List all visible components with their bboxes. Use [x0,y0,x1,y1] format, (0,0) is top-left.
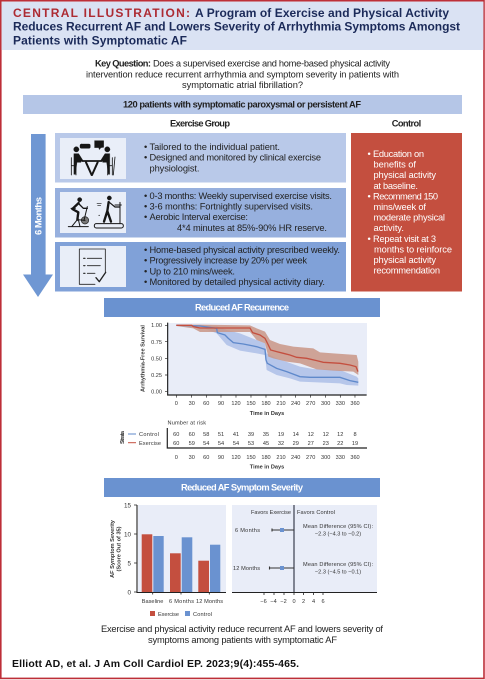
x axis labels: 6 [321,599,325,605]
row: days: 0 [175,455,178,461]
x axis labels: 4 [312,599,315,605]
x axis labels: 2 [302,599,305,605]
confidence band: control [176,325,358,386]
row: control: 60 [189,432,195,438]
row: days: 30 [189,455,195,461]
y axis labels: 10 [124,532,131,538]
x axis labels: −4 [270,599,277,605]
favors labels: Favors Exercise [251,510,291,516]
text: tailoring bullets: • [144,153,147,163]
icon: checklist [60,246,126,287]
icon: consultation [60,138,126,179]
x axis labels: 12 Months [196,599,223,605]
text: home-based bullets: Progressively increase by 20% per week [150,256,307,266]
y axis title: AF Symptom Severity [110,519,116,578]
title [2,2,483,50]
arrow: 6 months [23,134,53,297]
title: Reduces Recurrent AF and Lowers Severity of Arrhythmia Symptoms Amongst [13,20,460,34]
text: supervised bullets: • [144,202,147,212]
row: days: 210 [276,455,286,461]
row: exercise: 53 [248,441,254,447]
row: exercise: 54 [218,441,224,447]
x axis labels: −2 [280,599,287,605]
x axis labels: 330 [336,401,345,407]
row: control: 41 [233,432,239,438]
text: supervised bullets: 0-3 months: Weekly supervised exercise visits. [150,191,332,201]
row: control: 14 [293,432,299,438]
row: days: 240 [291,455,300,461]
panel: control: • [368,191,371,201]
row: exercise: 54 [233,441,239,447]
row: 12 months: 12 Months [233,566,260,572]
y axis labels: 0.25 [151,373,162,379]
row: exercise: 19 [352,441,358,447]
y axis labels: 15 [124,502,131,510]
row: days: 90 [218,455,224,461]
panel: control: months to reinforce [374,244,452,254]
text: home-based bullets: Up to 210 mins/week. [150,266,235,276]
text: home-based bullets: • [144,245,147,255]
text: supervised bullets: Aerobic Interval exercise: [150,212,248,222]
x axis labels [175,401,360,417]
row: exercise: 45 [263,441,269,447]
row: exercise: 23 [323,441,329,447]
row: control: 35 [263,432,269,438]
row: days: Time in Days [250,464,284,470]
row: 6 months: 6 Months [235,528,260,534]
row: days [175,455,360,470]
x axis labels: 360 [350,401,360,407]
row: control: 8 [353,432,357,438]
row: exercise [173,441,358,447]
forest plot: mean difference [232,505,377,605]
row: days: 330 [336,455,345,461]
confidence band: exercise [176,325,358,375]
key question: Key Question: [95,58,151,68]
y axis labels [140,323,162,395]
x axis labels: 60 [203,401,209,407]
x axis labels: 150 [246,401,256,407]
strata legend [120,430,161,447]
row: exercise: 22 [337,441,343,447]
favors labels [251,510,335,516]
text: tailoring bullets: Tailored to the individual patient. [150,142,280,152]
row: 6 months: Mean Difference (95% CI): [303,524,373,530]
row: exercise: 59 [189,441,195,447]
conclusion: symptoms among patients with symptomatic AF [148,635,337,645]
y axis labels: 0 [127,590,131,596]
favors labels: Favors Control [297,510,335,516]
y axis title [110,519,122,578]
title: Patients with Symptomatic AF [13,34,187,48]
text: tailoring bullets: Designed and monitored by clinical exercise [150,153,321,163]
strata legend: Control [139,432,159,438]
row: days: 120 [231,455,241,461]
row: exercise: 60 [173,441,179,447]
text: supervised bullets: • [144,191,147,201]
population banner: 120 patients with symptomatic paroxysmal or persistent AF [123,100,361,110]
text: tailoring bullets [144,142,321,173]
row: 12 months [233,562,373,576]
row: 6 months [235,524,373,538]
y axis labels: Arrhythmia-Free Survival [140,325,146,392]
row: control: 12 [308,432,314,438]
x axis labels: Baseline [142,599,163,605]
row: days: 270 [306,455,315,461]
text: supervised bullets: 3-6 months: Fortnightly supervised visits. [150,202,313,212]
bars: baseline [142,534,164,592]
text: supervised bullets: • [144,212,147,222]
panel: control: mins/week of [374,202,426,212]
row: days: 300 [321,455,330,461]
survival line: exercise [176,325,358,372]
key question: Does a supervised exercise and home-based physical activity [153,58,390,68]
title: CENTRAL ILLUSTRATION: [13,6,190,20]
survival line: control [176,325,358,382]
x axis labels [142,599,223,605]
panel: control: Recommend 150 [373,191,438,201]
heading: control: Control [392,119,421,129]
arrow: 6 months: 6 Months [34,197,44,235]
legend [150,611,212,618]
panel: control: recommendation [374,266,440,276]
y axis labels [124,502,131,596]
strata legend: Strata [120,430,126,444]
panel: control: benefits of [374,160,416,170]
row: days: 150 [246,455,256,461]
conclusion [101,624,383,645]
y axis labels: 0.00 [151,389,162,395]
title: A Program of Exercise and Physical Activity [195,6,449,20]
text: home-based bullets: Monitored by detailed physical activity diary. [150,277,325,287]
text: home-based bullets: • [144,277,147,287]
y axis labels: 0.75 [151,340,162,346]
text: tailoring bullets: • [144,142,147,152]
legend: Exercise [158,612,179,618]
key question: intervention reduce recurrent arrhythmia and symptom severity in patients with [86,69,399,79]
panel: control: activity. [374,223,404,233]
legend: Control [193,612,212,618]
panel: control: Education on [373,149,424,159]
row: control: 58 [203,432,209,438]
panel: control: physical activity [374,170,436,180]
row: 6 months: −2.3 (−4.3 to −0.2) [315,532,361,538]
key question: symptomatic atrial fibrillation? [182,80,303,90]
panel: control: • [368,234,371,244]
panel: individual tailoring [55,133,346,182]
row: control: 12 [337,432,343,438]
x axis labels: 30 [189,401,195,407]
y axis labels: 1.00 [151,323,162,329]
panel: control: • [368,149,371,159]
bars: 6 months [170,537,192,592]
population banner [23,95,462,114]
x axis labels: 6 Months [169,599,194,605]
bars: 12 months [198,545,220,592]
conclusion: Exercise and physical activity reduce recurrent AF and lowers severity of [101,624,383,634]
row: control: 39 [248,432,254,438]
y axis labels: 5 [127,560,131,568]
text: home-based bullets: Home-based physical activity prescribed weekly. [150,245,340,255]
icon: bike and treadmill [60,192,126,233]
text: home-based bullets: • [144,266,147,276]
table: number at risk [120,420,367,470]
panel: supervised exercise [55,188,346,238]
x axis labels: 270 [306,401,315,407]
row: exercise: 32 [278,441,284,447]
x axis labels: 0 [175,401,178,407]
table: number at risk: Number at risk [168,420,206,426]
y axis labels: 0.50 [151,356,162,362]
panel: control [351,133,462,292]
text: home-based bullets: • [144,256,147,266]
panel: control: at baseline. [374,181,418,191]
chart: arrhythmia-free survival [140,323,367,417]
key question [86,58,399,90]
x axis labels: 300 [321,401,330,407]
y axis title: (Score Out of 35) [116,526,122,572]
citation: Elliott AD, et al. J Am Coll Cardiol EP. 2023;9(4):455-465. [12,658,299,670]
text: supervised bullets: 4*4 minutes at 85%-90% HR reserve. [177,223,327,233]
panel: control: Repeat visit at 3 [373,234,436,244]
heading: reduced AF symptom severity: Reduced AF Symptom Severity [181,483,304,493]
heading: reduced AF symptom severity [104,478,380,497]
text: supervised bullets [144,191,332,233]
row: days: 360 [350,455,360,461]
x axis labels: Time in Days [250,411,284,417]
heading: reduced AF recurrence [104,298,380,317]
row: control [173,432,357,438]
row: days: 180 [261,455,271,461]
row: control: 19 [278,432,284,438]
panel: control: physical activity [374,255,436,265]
bar chart: symptom severity [110,502,226,605]
row: control: 12 [323,432,329,438]
row: exercise: 54 [203,441,209,447]
x axis labels: 240 [291,401,300,407]
strata legend: Exercise [139,441,161,447]
heading: exercise group: Exercise Group [170,119,230,129]
row: exercise: 27 [308,441,314,447]
x axis labels: 90 [218,401,224,407]
panel: control: moderate physical [374,213,445,223]
row: 12 months: Mean Difference (95% CI): [303,562,373,568]
x axis labels: 120 [231,401,241,407]
row: control: 51 [218,432,224,438]
row: exercise: 29 [293,441,299,447]
row: 12 months: −2.3 (−4.5 to −0.1) [315,570,361,576]
text: tailoring bullets: physiologist. [150,163,200,173]
row: days: 60 [203,455,209,461]
x axis labels: 180 [261,401,271,407]
row: control: 60 [173,432,179,438]
heading: reduced AF recurrence: Reduced AF Recurrence [195,303,289,313]
x axis labels: −6 [260,599,267,605]
x axis labels: 210 [276,401,286,407]
x axis labels: 0 [292,599,296,605]
text: home-based bullets [144,245,340,287]
panel: home-based activity [55,242,346,292]
x axis labels [260,599,325,605]
